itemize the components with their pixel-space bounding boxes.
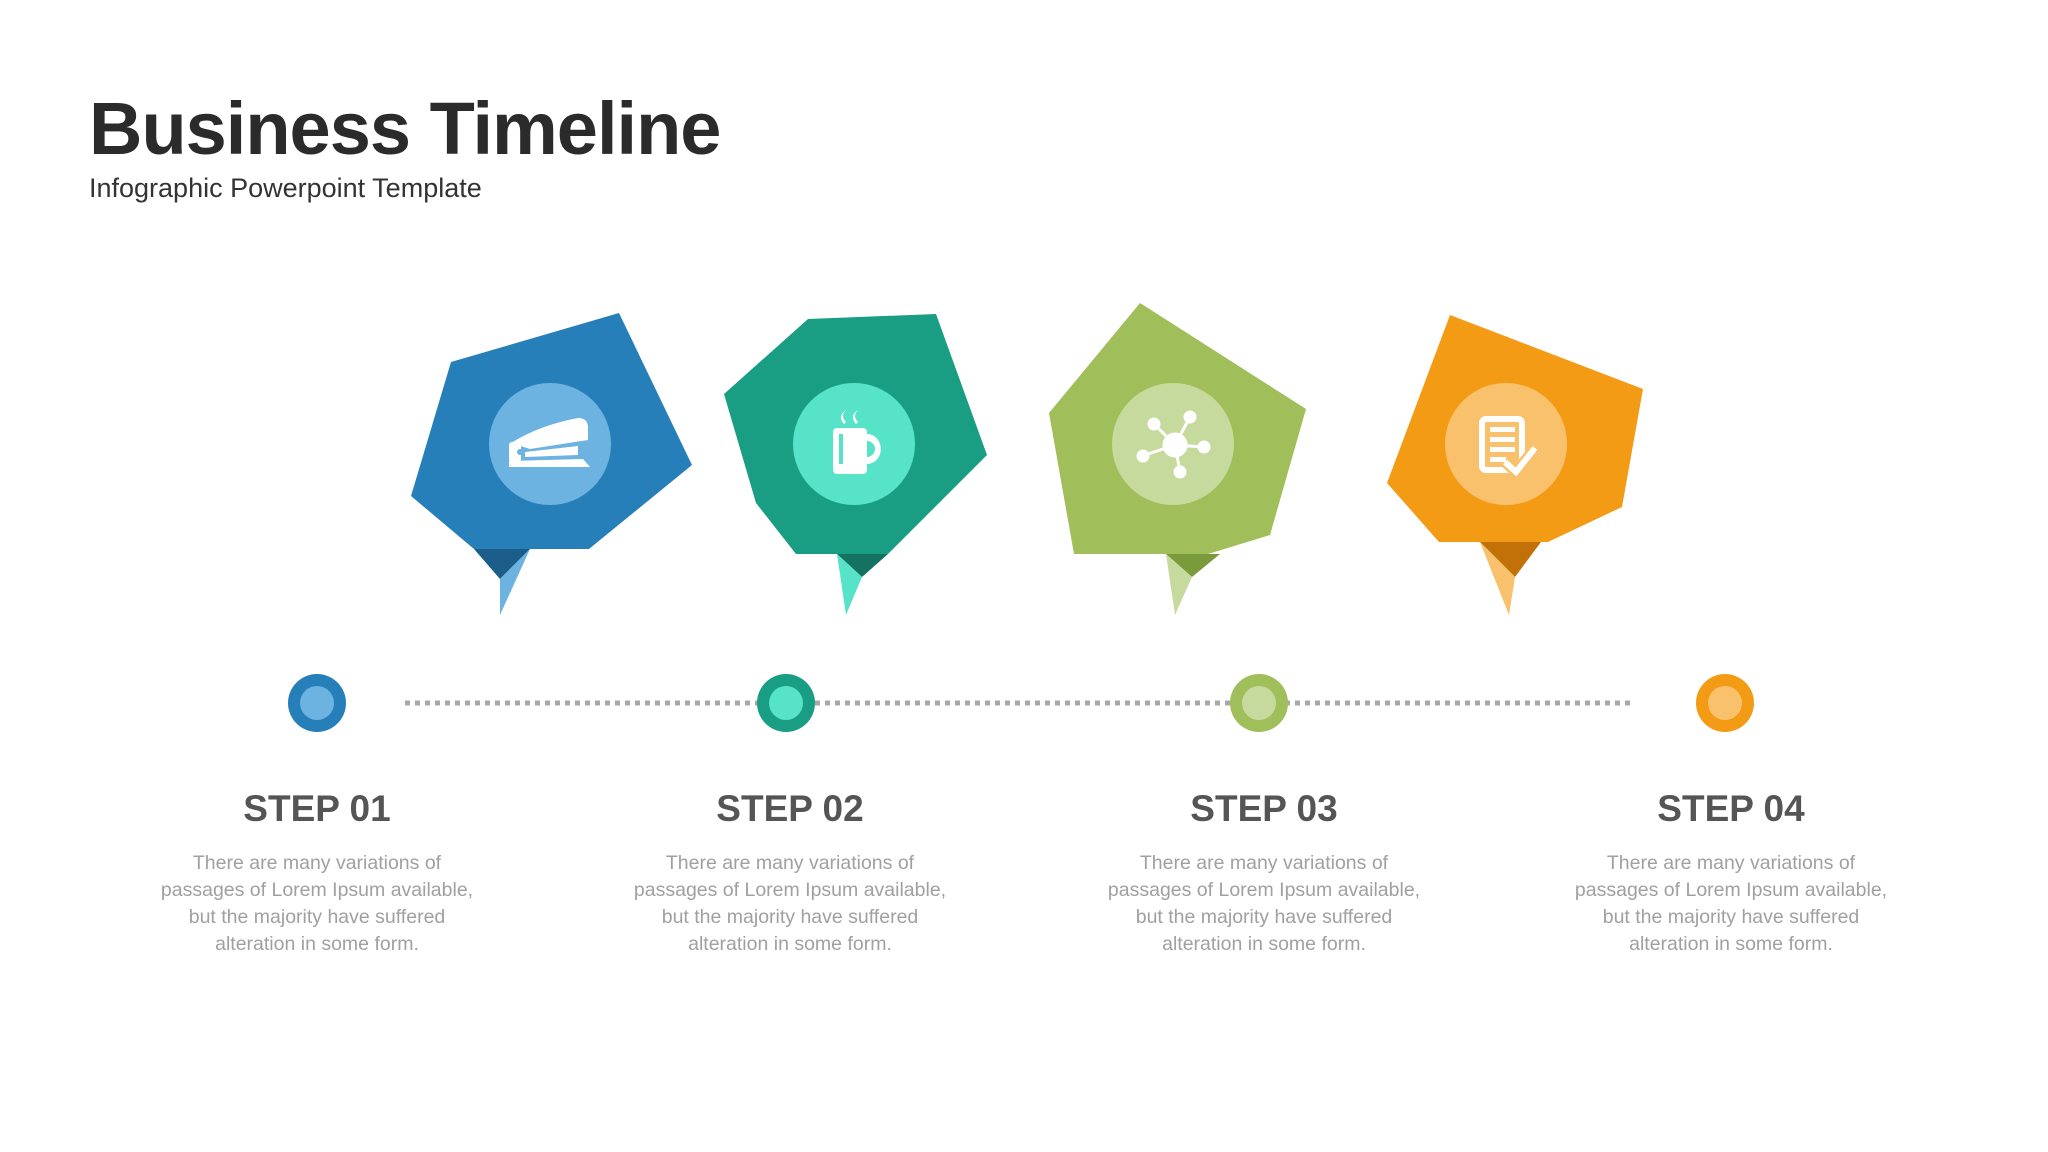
icon: checklist — [1482, 419, 1535, 472]
step 1 text: STEP 01 — [243, 788, 391, 829]
step 4 text: There are many variations of passages of Lorem Ipsum available, but the majority have suffered alteration in some form. — [1575, 852, 1887, 955]
dot 2 — [757, 674, 815, 732]
marker 1 — [411, 313, 692, 615]
step 2 text: STEP 02 — [716, 788, 864, 829]
subtitle: Infographic Powerpoint Template — [89, 173, 482, 203]
dot 3 — [1230, 674, 1288, 732]
icon: network — [1138, 412, 1209, 477]
marker 2 — [724, 314, 987, 615]
step 2 text: There are many variations of passages of Lorem Ipsum available, but the majority have suffered alteration in some form. — [634, 852, 946, 955]
step 3 text: STEP 03 — [1190, 788, 1338, 829]
step 1 text: There are many variations of passages of Lorem Ipsum available, but the majority have suffered alteration in some form. — [161, 852, 473, 955]
dot 1 — [288, 674, 346, 732]
title: Business Timeline — [89, 87, 720, 170]
icon: stapler — [509, 418, 590, 467]
icon: cup — [833, 410, 881, 474]
dot 4 — [1696, 674, 1754, 732]
marker 4 — [1387, 315, 1643, 615]
step 3 text — [1108, 788, 1420, 955]
step 2 text — [634, 788, 946, 955]
step 3 text: There are many variations of passages of Lorem Ipsum available, but the majority have suffered alteration in some form. — [1108, 852, 1420, 955]
step 4 text — [1575, 788, 1887, 955]
marker 3 — [1049, 303, 1306, 615]
dotted timeline — [405, 700, 1633, 706]
step 1 text — [161, 788, 473, 955]
step 4 text: STEP 04 — [1657, 788, 1805, 829]
